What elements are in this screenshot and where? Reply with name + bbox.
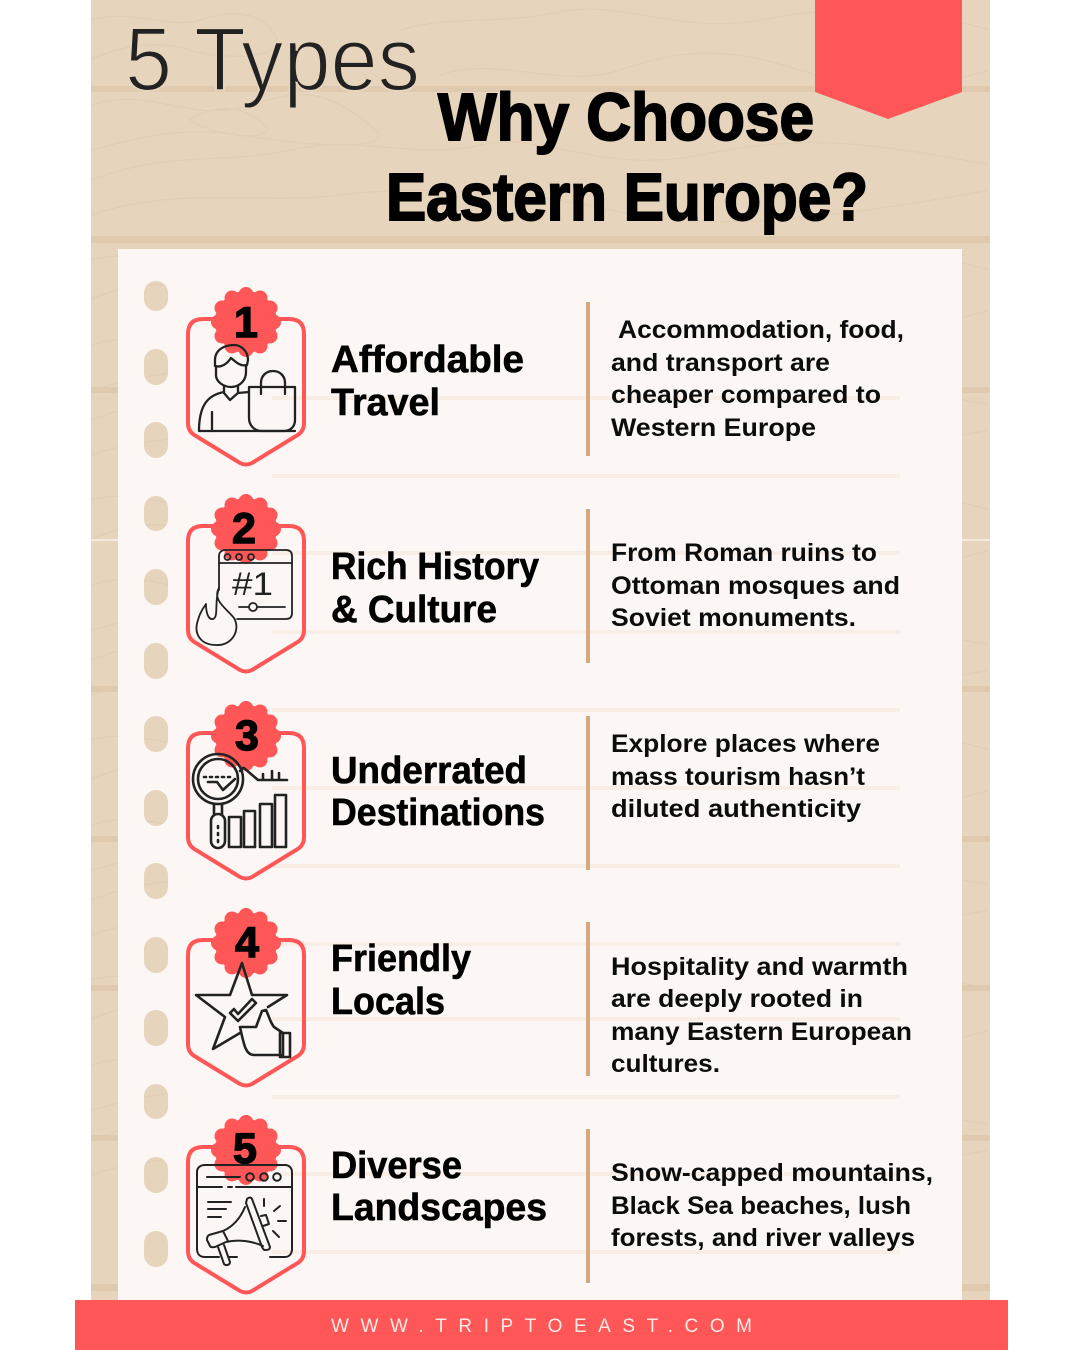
heading: Friendly — [331, 938, 471, 980]
heading — [331, 546, 539, 631]
heading: Diverse — [331, 1145, 462, 1187]
icon: traveller with shopping bag — [199, 345, 295, 431]
badge 2: 2 — [232, 505, 256, 553]
description: Soviet monuments. — [611, 604, 856, 632]
heading — [331, 1145, 547, 1229]
item 4: Friendly Locals — [188, 908, 912, 1086]
badge 5 — [188, 1115, 304, 1292]
item 3: Underrated Destinations — [188, 701, 880, 878]
description: From Roman ruins to — [611, 539, 877, 567]
description: Snow-capped mountains, — [611, 1159, 933, 1187]
description: many Eastern European — [611, 1018, 912, 1046]
title — [386, 80, 868, 235]
item 5: Diverse Landscapes — [188, 1115, 933, 1292]
icon: star with thumbs up — [196, 963, 290, 1057]
subtitle: 5 Types: 5 Types — [125, 10, 420, 110]
description: diluted authenticity — [611, 795, 861, 823]
heading — [331, 750, 545, 834]
description: cheaper compared to — [611, 381, 881, 409]
heading — [331, 938, 471, 1023]
description: cultures. — [611, 1050, 720, 1078]
paper panel with punched holes — [118, 249, 962, 1300]
heading: Rich History — [331, 546, 539, 588]
description: and transport are — [611, 349, 830, 377]
divider — [586, 1129, 590, 1283]
badge 3: 3 — [235, 712, 259, 760]
heading: Locals — [331, 981, 445, 1023]
heading: Affordable — [331, 339, 524, 381]
item 2: Rich History & Culture — [188, 494, 900, 672]
description — [611, 1159, 933, 1252]
description — [611, 316, 904, 442]
icon: browser window with megaphone — [197, 1165, 292, 1265]
badge 5: 5 — [233, 1125, 257, 1173]
heading: Underrated — [331, 750, 527, 792]
description: Explore places where — [611, 730, 880, 758]
divider — [586, 922, 590, 1076]
heading: Destinations — [331, 792, 545, 834]
badge 4 — [188, 908, 304, 1086]
description: are deeply rooted in — [611, 985, 863, 1013]
title: Eastern Europe? — [386, 160, 868, 235]
badge 4: 4 — [235, 919, 259, 967]
badge 2 — [188, 494, 304, 672]
ribbon tag — [815, 0, 962, 119]
description: Western Europe — [611, 414, 816, 442]
heading: & Culture — [331, 589, 497, 631]
divider — [586, 302, 590, 456]
description: mass tourism hasn’t — [611, 763, 866, 791]
description: Black Sea beaches, lush — [611, 1192, 911, 1220]
divider — [586, 509, 590, 663]
badge 1 — [188, 287, 304, 464]
heading — [331, 339, 524, 424]
badge 1: 1 — [234, 299, 258, 347]
title: Why Choose — [438, 80, 814, 155]
icon: ranking window with flame — [197, 550, 292, 645]
heading: Landscapes — [331, 1187, 547, 1229]
footer bar — [75, 1300, 1008, 1350]
description — [611, 730, 880, 823]
heading: Travel — [331, 382, 440, 424]
description: Ottoman mosques and — [611, 572, 900, 600]
description: Accommodation, food, — [618, 316, 904, 344]
item 1: Affordable Travel — [188, 287, 904, 464]
description: forests, and river valleys — [611, 1224, 915, 1252]
divider — [586, 716, 590, 870]
description — [611, 539, 900, 632]
badge 3 — [188, 701, 304, 878]
description — [611, 953, 912, 1078]
description: Hospitality and warmth — [611, 953, 908, 981]
icon: ranking window with flame: #1 — [232, 566, 273, 602]
website url: WWW.TRIPTOEAST.COM — [331, 1316, 752, 1337]
icon: magnifier and bar chart — [193, 754, 287, 848]
